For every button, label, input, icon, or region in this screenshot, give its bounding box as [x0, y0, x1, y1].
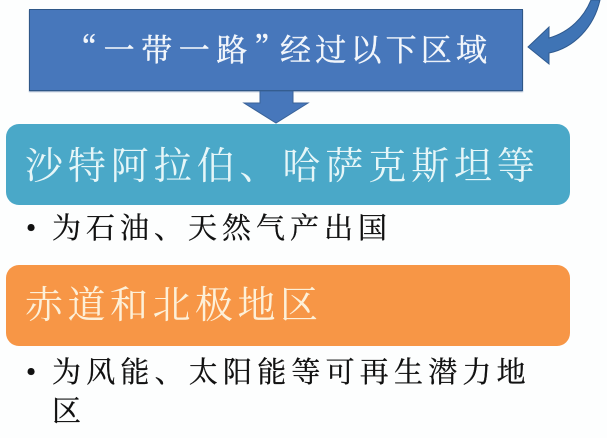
bullet text: oil and gas: •: [26, 212, 41, 244]
bullet text: renewable energy: •: [26, 356, 41, 388]
heading: header text: [66, 25, 491, 70]
panel: header box: [29, 9, 523, 91]
heading: header text: 经过以下区域: [280, 25, 491, 70]
bullet text: renewable energy: [26, 350, 531, 430]
text: 为石油、天然气产出国: [52, 206, 392, 247]
icon: down arrow: [242, 90, 310, 124]
panel: teal band: [6, 124, 570, 205]
panel: orange band: [6, 265, 570, 346]
bullet text: renewable energy: 为风能、太阳能等可再生潜力地: [52, 350, 531, 391]
bullet text: oil and gas: [26, 206, 392, 247]
heading: teal band text: 沙特阿拉伯、哈萨克斯坦等: [25, 135, 540, 190]
heading: orange band text: 赤道和北极地区: [25, 274, 323, 329]
heading: header text: “一带一路”: [66, 25, 292, 70]
icon: curved arrow pointing to header box: [527, 0, 600, 65]
bullet text: renewable energy: 区: [52, 389, 86, 430]
